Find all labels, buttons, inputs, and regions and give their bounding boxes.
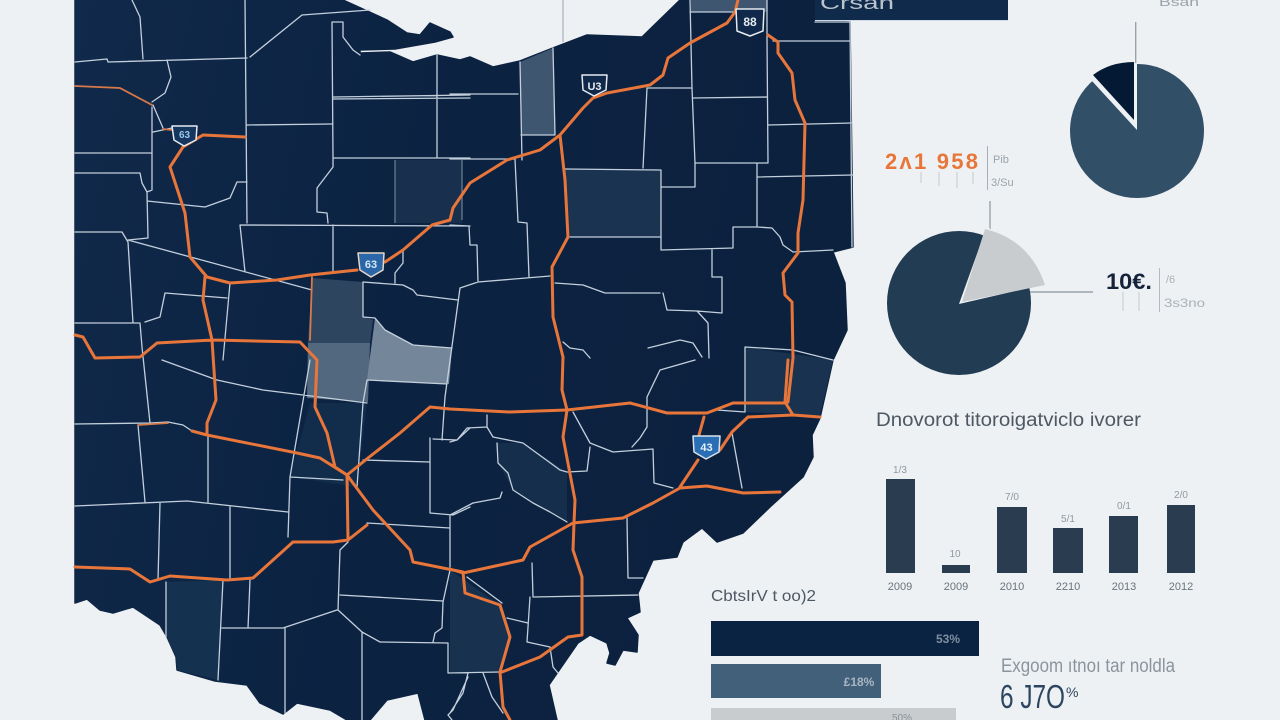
- icon: highway shield northeast: 88: [743, 15, 757, 29]
- pie leader lines: [990, 201, 1093, 292]
- stat: orange figure: Pib: [993, 154, 1009, 166]
- pie chart: upper: [1070, 22, 1204, 198]
- heading: horizontal bars: CbtsIrV t oo)2: [711, 588, 816, 605]
- year labels: [888, 581, 1193, 593]
- horizontal bar chart: [711, 621, 979, 720]
- bar: second: [711, 664, 881, 698]
- muted county boundaries: [395, 160, 462, 223]
- icon: highway shield southeast: 43: [700, 442, 713, 454]
- stat: orange figure: 3/Su: [991, 177, 1014, 189]
- year labels: 2009: [944, 581, 968, 593]
- stat: dark figure: 3s3no: [1164, 296, 1205, 310]
- value labels: 2/0: [1174, 490, 1188, 501]
- icon: highway shield west: [172, 126, 197, 146]
- pie chart: lower: [887, 201, 1093, 375]
- value labels: 7/0: [1005, 492, 1019, 503]
- year labels: 2210: [1056, 581, 1080, 593]
- map: region with counties and highways: [75, 0, 853, 720]
- callout: percentage: [1000, 656, 1175, 715]
- value labels: 5/1: [1061, 514, 1075, 525]
- value labels: 0/1: [1117, 501, 1131, 512]
- title box: [815, 0, 1008, 21]
- year labels: 2009: [888, 581, 912, 593]
- icon: highway shield west: 63: [179, 130, 190, 141]
- value labels: 10: [949, 549, 961, 560]
- value labels: [893, 465, 1188, 560]
- callout: percentage: Exgoom ıtnoı tar noldla: [1001, 656, 1175, 677]
- value labels: 1/3: [893, 465, 907, 476]
- map outline: [75, 0, 853, 720]
- stat: dark figure: [1106, 268, 1205, 312]
- county boundaries: [75, 0, 853, 720]
- icon: highway shield north: [582, 75, 607, 96]
- bar: first: 53%: [936, 632, 960, 646]
- columns: [886, 479, 1195, 573]
- stat: orange figure: 2ʌ1 958: [885, 149, 978, 174]
- callout: percentage: %: [1066, 684, 1078, 700]
- callout: percentage: 6 J7O: [1000, 678, 1065, 715]
- stat: dark figure: 10€.: [1106, 269, 1152, 294]
- year labels: 2010: [1000, 581, 1024, 593]
- bar: second: £18%: [844, 675, 875, 689]
- bar: first: [711, 621, 979, 656]
- stat: dark figure: /6: [1166, 274, 1175, 286]
- leader line: top of map: [562, 0, 564, 42]
- highlighted counties: [166, 0, 833, 680]
- year labels: 2012: [1169, 581, 1193, 593]
- icon: highway shield northeast: [736, 9, 764, 36]
- thin highway segments: [75, 86, 312, 425]
- icon: highway shield central: 63: [365, 259, 377, 271]
- bar chart: yearly columns: [886, 465, 1195, 593]
- icon: highway shield central: [358, 253, 384, 277]
- icon: highway shield north: U3: [587, 81, 602, 93]
- icon: highway shield southeast: [693, 436, 720, 459]
- stat: orange figure: [885, 146, 1014, 190]
- bar: third: [711, 708, 956, 720]
- pie leader line: [1135, 22, 1136, 64]
- highway network: [75, 0, 820, 720]
- year labels: 2013: [1112, 581, 1136, 593]
- heading: bar chart: Dnovorot titoroigatviclo ivorer: [876, 410, 1142, 431]
